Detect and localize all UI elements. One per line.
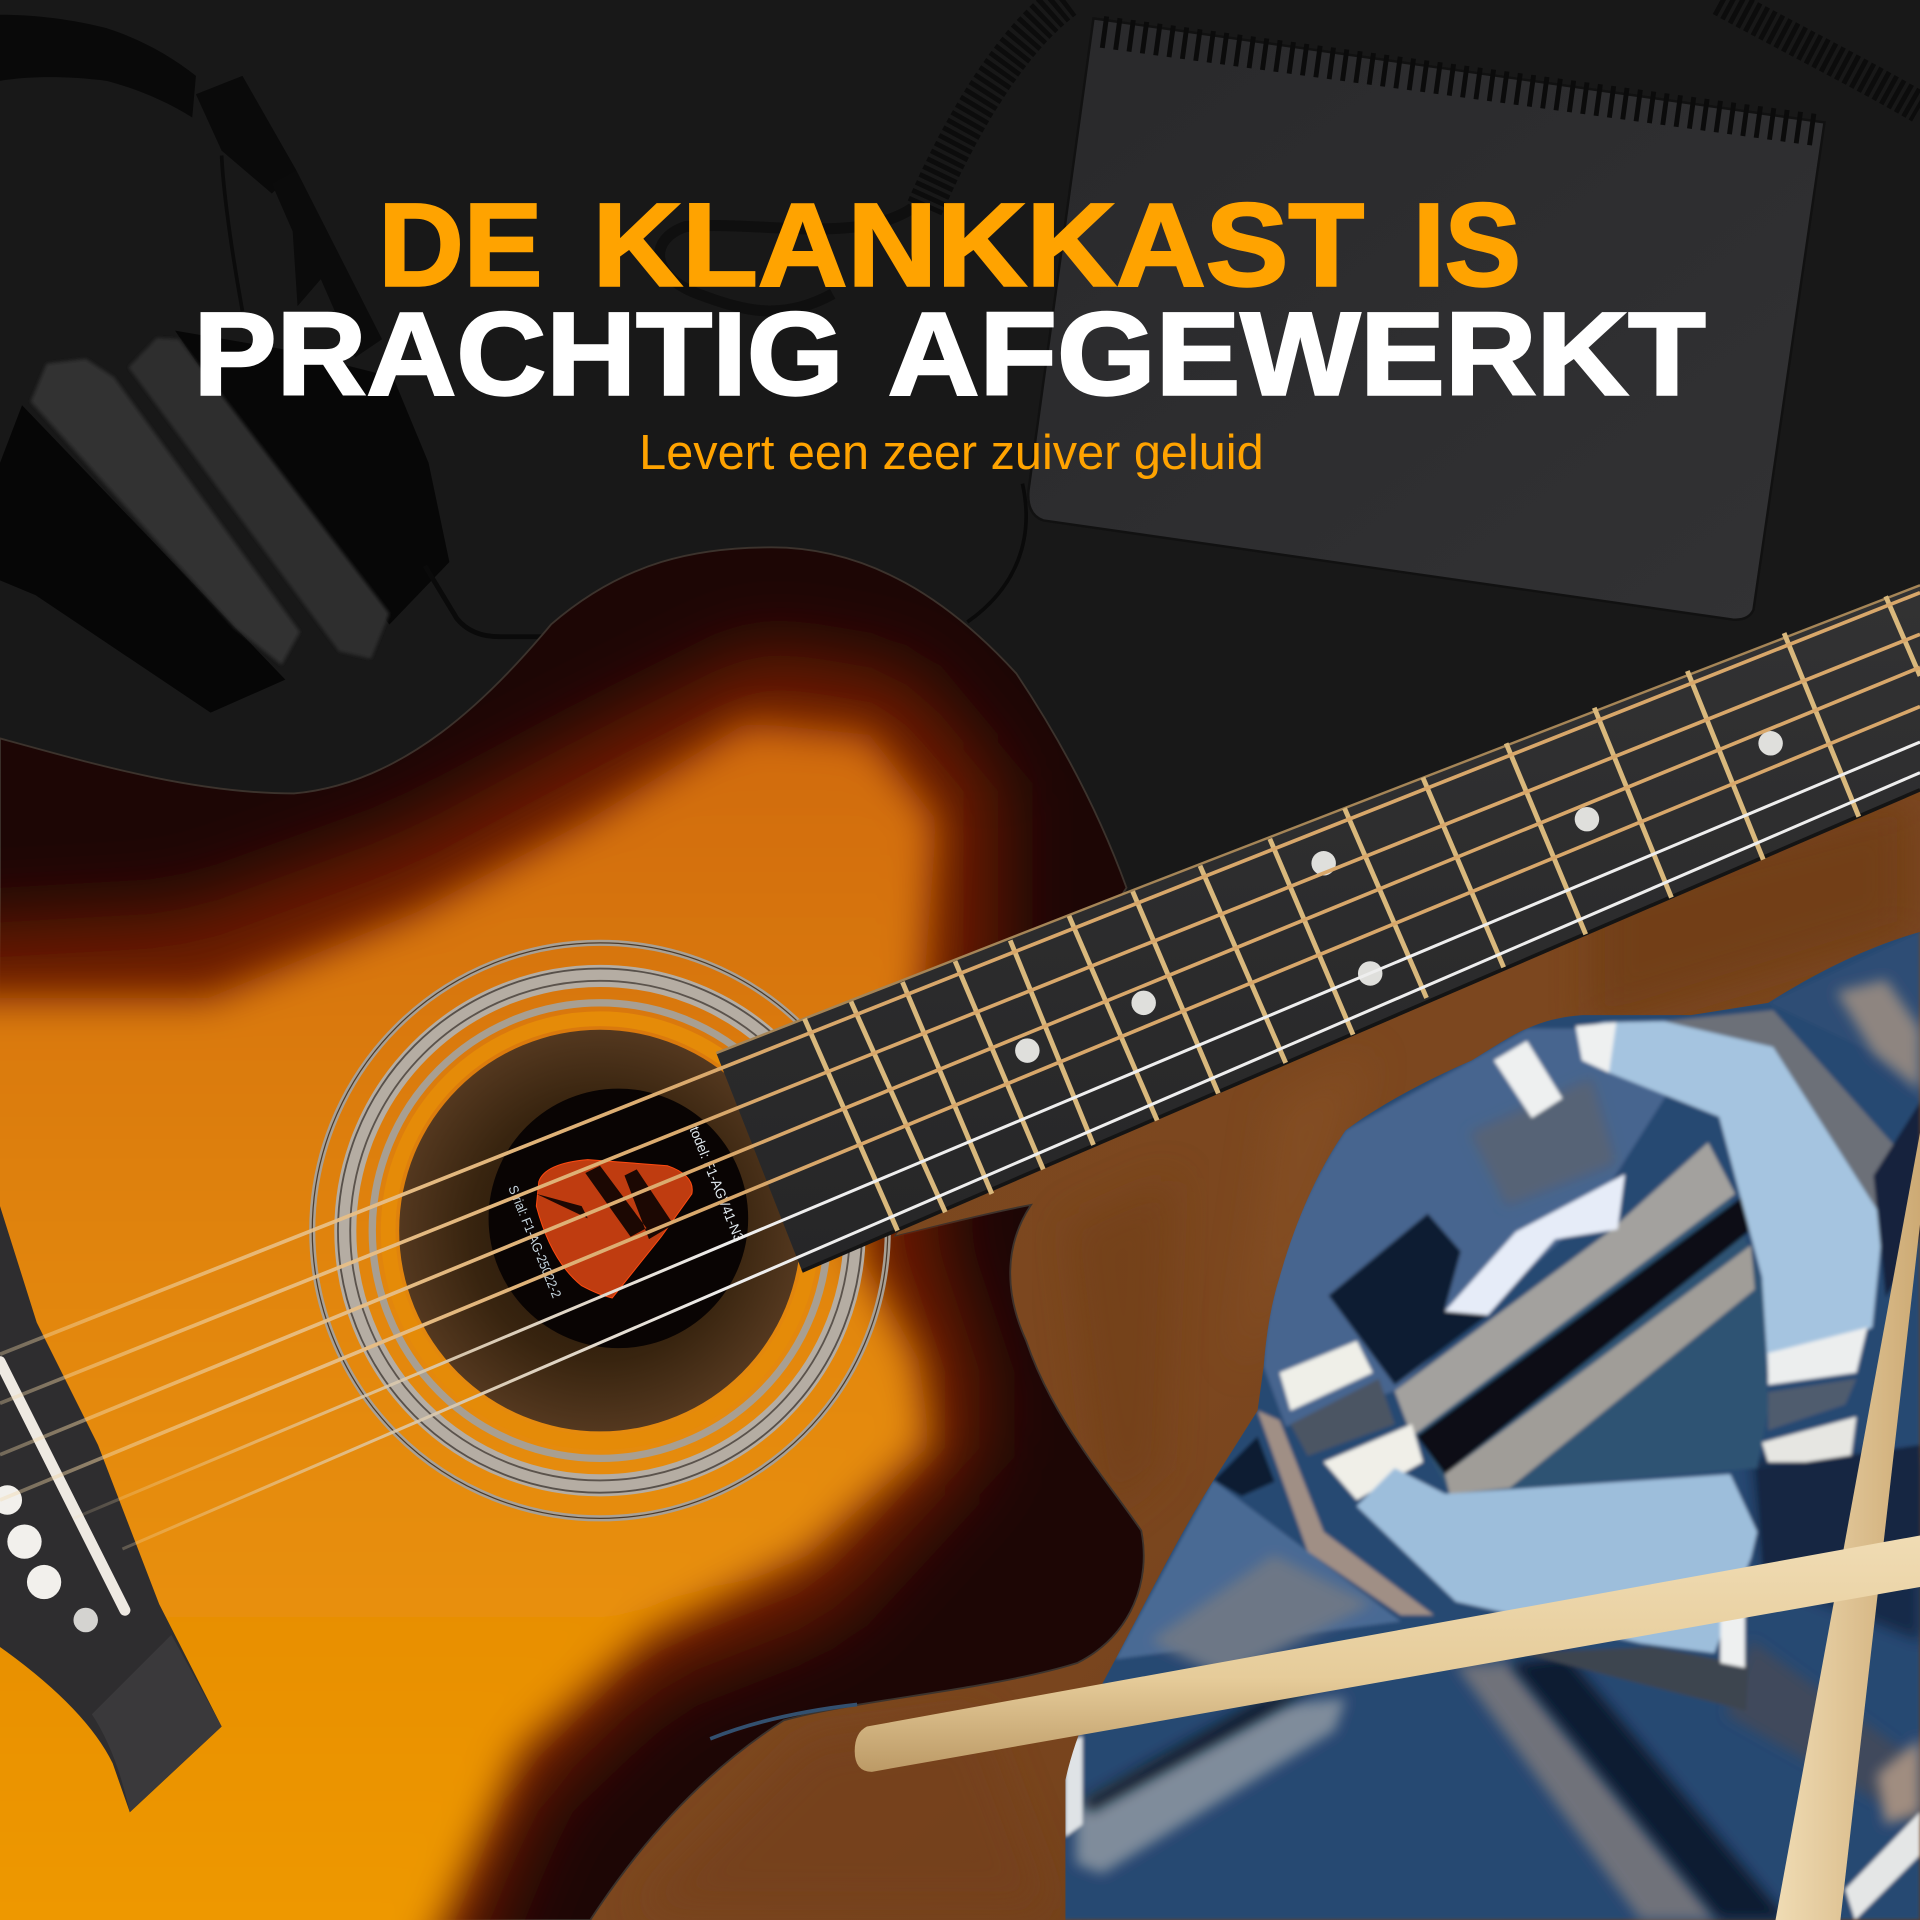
headphone cable [425,566,550,637]
title line two: PRACHTIG [193,288,844,419]
bridge pins [0,1485,98,1632]
outer collar left [1264,1029,1678,1427]
drumstick: vertical [1776,1133,1920,1920]
diagonal body stripes [1456,1663,1719,1920]
white label [1445,1174,1625,1315]
label text: serial: S rial: F1-AG-25022-2 [505,1183,564,1300]
sunburst finish [0,649,998,1920]
plaid jacket [1053,918,1920,1920]
pick logo [536,1160,692,1298]
inlay dots [1015,731,1783,1063]
bridge [0,1206,222,1812]
jacket base [1053,918,1920,1920]
shirt grey stripe lower [1445,1245,1755,1494]
title line one [378,179,1521,310]
title line two [193,288,1706,419]
right ear cup [175,331,449,624]
title line one: KLANKKAST [593,179,1364,310]
notebook spiral binding [1102,32,1815,130]
right collar [1576,1021,1883,1373]
ear pad front [31,359,300,665]
thin side edge [710,1704,857,1739]
label text: model: todel: F1-AGV41-N3 [687,1124,747,1244]
lower black band [1082,1694,1310,1818]
wooden tabletop [576,784,1920,1920]
headphones [0,15,550,713]
title line one: IS [1413,179,1521,310]
collar trim stripes [1280,1341,1373,1411]
drumstick: horizontal [855,1536,1920,1772]
sound hole rosette [312,943,888,1518]
left ear cup [0,405,285,713]
frets [804,596,1920,1231]
title [193,179,1706,419]
lower grey band [1076,1698,1346,1873]
subtitle: Levert een zeer zuiver geluid [639,426,1264,480]
right collar outer band [1664,1010,1910,1237]
right dark panel [1757,1445,1920,1567]
lower left panel [1116,1480,1401,1659]
guitar strings [0,593,1920,1549]
notebook [1028,18,1824,620]
title line two: AFGEWERKT [888,288,1706,419]
ear pad rear [129,338,389,659]
saddle [0,1362,125,1610]
guitar neck [716,585,1920,1271]
coiled cable [660,0,1920,622]
yoke arm [272,170,382,358]
sound hole [399,1030,801,1431]
guitar body [0,547,1144,1920]
shirt grey stripe upper [1395,1142,1735,1436]
shirt black stripe [1417,1194,1749,1474]
lower collar [1357,1468,1757,1653]
label disc [489,1089,748,1348]
shirt interior [1420,1202,1766,1486]
title line one: DE [378,179,542,310]
headband [0,15,196,118]
